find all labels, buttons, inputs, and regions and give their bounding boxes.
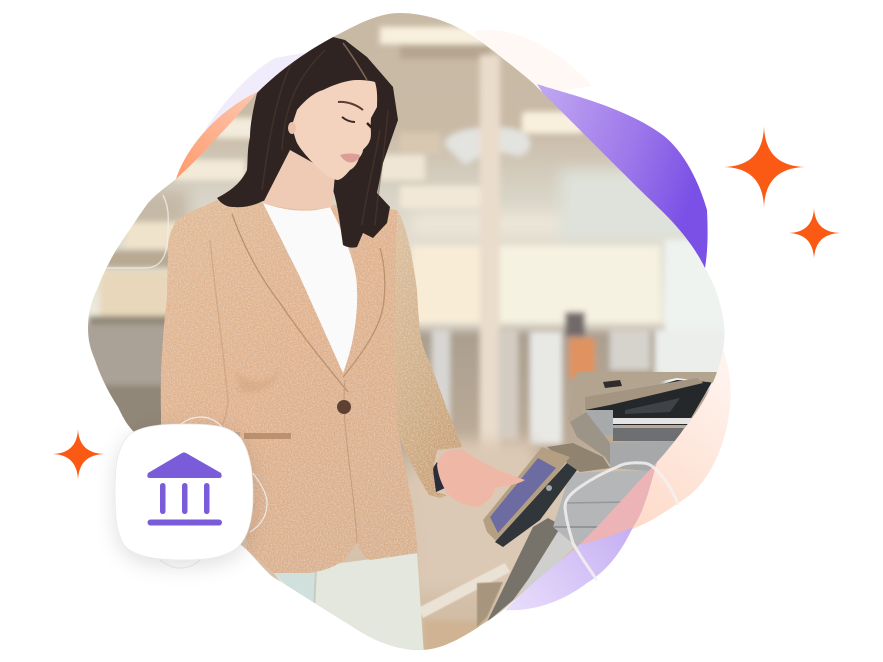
- document intake: [585, 380, 712, 425]
- pocket: [244, 433, 291, 439]
- decorative shape: top lavender: [205, 50, 320, 130]
- feeder body: [585, 395, 620, 435]
- woman: face: [293, 80, 377, 180]
- button: [337, 400, 351, 414]
- decorative shape: lavender wave bottom: [505, 462, 657, 610]
- scanner lid: [576, 372, 717, 397]
- decorative shape: purple wave top right: [537, 84, 708, 268]
- decorative shape: orange crescent: [176, 92, 262, 180]
- decorative shape: peach wave bottom right: [578, 350, 731, 545]
- printer: [487, 372, 717, 622]
- bank base: [148, 520, 222, 526]
- stand: [488, 518, 558, 621]
- icon badge: bank: [115, 417, 267, 568]
- lid wedge: [585, 378, 703, 410]
- woman: hand: [437, 449, 525, 507]
- lapel lines: [232, 214, 348, 392]
- woman: jacket body and left arm: [161, 200, 418, 573]
- shadow fold: [236, 374, 278, 392]
- decorative shape: faint peach top: [473, 30, 592, 95]
- thin white curve left: [107, 195, 168, 268]
- sparkle: small orange right: [789, 208, 840, 259]
- woman: trousers: [273, 553, 424, 655]
- thin white curve over printer: [565, 463, 678, 580]
- thin outline loops: [160, 417, 267, 568]
- woman: hair: [217, 33, 398, 248]
- sparkle: small orange left: [53, 429, 104, 480]
- shirt: [263, 203, 357, 373]
- bank columns: [160, 483, 210, 514]
- panel top: [547, 443, 610, 472]
- woman: facial features: [288, 102, 372, 162]
- photo clipped to blob: [88, 13, 724, 650]
- badge card: [115, 424, 253, 560]
- touch screen panel: [483, 447, 577, 547]
- woman: right sleeve: [393, 210, 462, 498]
- sleeve seam: [210, 240, 228, 432]
- bank roof: [147, 452, 222, 478]
- office background: [88, 13, 724, 650]
- tray: [570, 412, 610, 464]
- decorative shape: pink overlap: [578, 462, 657, 545]
- woman: cuff lining: [433, 462, 445, 493]
- main grey body: [553, 470, 649, 547]
- sparkle: large orange: [724, 126, 805, 208]
- floor rail and box: [418, 563, 510, 627]
- woman: neck: [263, 150, 335, 210]
